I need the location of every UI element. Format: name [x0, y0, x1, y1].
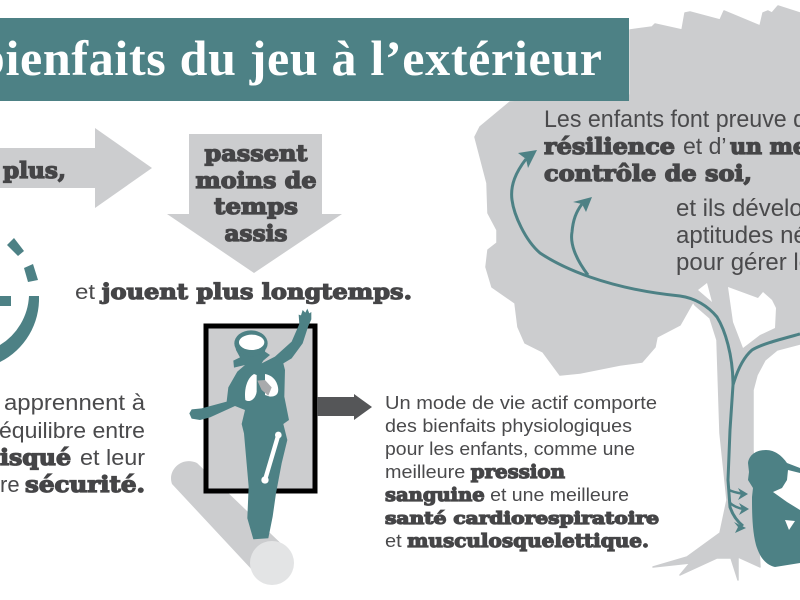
text: mode de vie actif: meilleure pression — [385, 461, 566, 483]
text: risque and safety: équilibre entre — [0, 418, 145, 443]
down arrow: passent moins de temps assis: moins de — [196, 168, 316, 194]
text: risque and safety: et leur — [80, 445, 145, 470]
text: mode de vie actif — [385, 392, 659, 552]
right arrow: plus: plus, — [3, 158, 66, 184]
text: mode de vie actif: pour les enfants, comme une — [385, 438, 635, 459]
text: et jouent plus longtemps: et jouent plus longtemps. — [75, 279, 412, 304]
text: risque and safety: apprennent à — [4, 390, 146, 415]
tree branch arrows — [512, 159, 800, 526]
seated child highlight — [785, 520, 795, 530]
text: mode de vie actif: des bienfaits physiologiques — [385, 415, 632, 436]
text: resilience — [544, 106, 800, 276]
text: mode de vie actif: Un mode de vie actif comporte — [385, 392, 657, 413]
right arrow: plus — [0, 128, 152, 208]
text: resilience: et d’ — [683, 133, 726, 159]
child silhouette — [189, 309, 311, 539]
text: mode de vie actif: et musculosquelettique. — [385, 530, 649, 552]
text: mode de vie actif: sanguine et une meilleure — [385, 484, 629, 506]
illustration: child on log — [171, 309, 315, 585]
text: resilience: contrôle de soi, — [544, 161, 752, 187]
log — [171, 461, 294, 585]
arrowheads — [518, 150, 749, 533]
text: resilience: résilience — [544, 134, 675, 160]
icon: dashed ring — [0, 238, 39, 362]
illustration: seated child — [748, 450, 800, 567]
text: risque and safety: re — [0, 472, 20, 497]
title banner — [0, 18, 629, 101]
canopy gaps — [698, 283, 776, 348]
down arrow: passent moins de temps assis: temps — [214, 194, 298, 220]
text: risque and safety — [0, 390, 146, 498]
x-ray box — [206, 326, 315, 491]
down arrow: passent moins de temps assis — [167, 134, 342, 273]
down arrow: passent moins de temps assis: assis — [224, 221, 288, 247]
text: risque and safety: isqué — [0, 445, 71, 471]
tree canopy and trunk — [475, 6, 800, 580]
text: mode de vie actif: santé cardiorespiratoire — [385, 509, 659, 529]
arrow: dark — [317, 394, 372, 420]
down arrow: passent moins de temps assis: passent — [204, 141, 308, 167]
text: risque and safety: sécurité. — [25, 472, 145, 498]
illustration: tree — [475, 6, 800, 580]
